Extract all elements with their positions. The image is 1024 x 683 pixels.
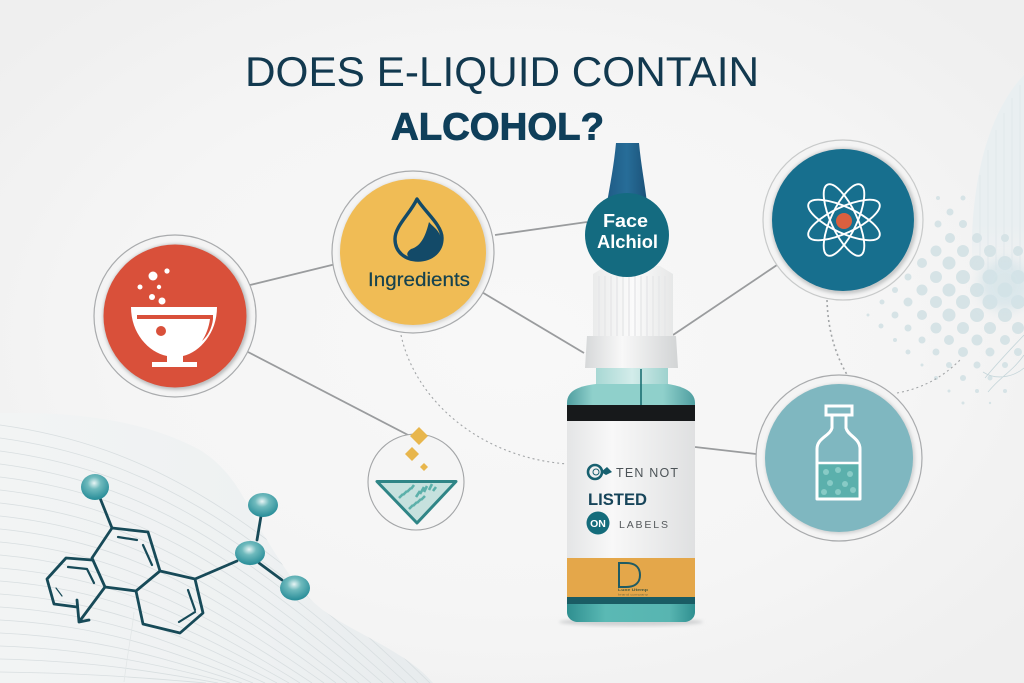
molecule bonds: [47, 498, 282, 633]
neck: [596, 368, 668, 388]
halftone dot decoration: [866, 196, 1024, 404]
label: Ingredients: Ingredients: [368, 270, 470, 291]
liquid base: [567, 597, 695, 622]
teal badge: [585, 193, 669, 277]
white label: [567, 421, 695, 558]
icon: bottle: [817, 406, 860, 499]
label text: LISTED: LISTED: [588, 490, 647, 509]
blue haze and swirl decoration: [979, 259, 1024, 392]
teal badge: Face: [603, 210, 648, 231]
icon: teal triangle: [377, 482, 456, 523]
label logo mark: [588, 465, 612, 479]
glass shoulder: [567, 384, 695, 410]
orange band logo: brand company: [618, 592, 649, 596]
dropper tip: [607, 143, 647, 203]
node: small triangle circle: [368, 427, 464, 530]
label text: TEN NOT: TEN NOT: [616, 466, 678, 480]
triangle hatch marks: [399, 484, 436, 509]
orange band logo: [618, 563, 649, 596]
background wave with contour lines: [0, 413, 433, 683]
molecule atoms: [81, 474, 310, 600]
node: yellow ingredients circle: [332, 171, 494, 333]
black band: [567, 405, 695, 421]
title: ALCOHOL?: [391, 106, 604, 148]
label badge: ON: [586, 512, 610, 534]
dropper bottle: [559, 143, 703, 626]
icon: droplet: [395, 199, 442, 260]
icon: atom: [803, 179, 885, 261]
node: red bowl circle: [94, 235, 256, 397]
label badge: ON: ON: [590, 518, 606, 530]
node: atom circle: [763, 140, 923, 300]
dropper cap: [593, 266, 673, 337]
connector lines: [248, 222, 777, 454]
icon: yellow diamonds: [405, 427, 428, 471]
dotted arcs: [401, 300, 960, 464]
faint top-right contour dome: [972, 75, 1024, 275]
title: [245, 48, 759, 148]
icon: bowl with bubbles: [131, 268, 217, 367]
orange band logo: Luxe Utemp: [618, 587, 649, 592]
bottle shadow: [559, 618, 703, 626]
teal badge: Alchiol: [597, 231, 658, 252]
orange band: [567, 558, 695, 597]
molecule diagram: [47, 474, 310, 633]
label text: LABELS: LABELS: [619, 519, 668, 531]
node: pale teal bottle circle: [756, 375, 922, 541]
title: DOES E-LIQUID CONTAIN: [245, 48, 759, 95]
collar: [585, 336, 678, 368]
